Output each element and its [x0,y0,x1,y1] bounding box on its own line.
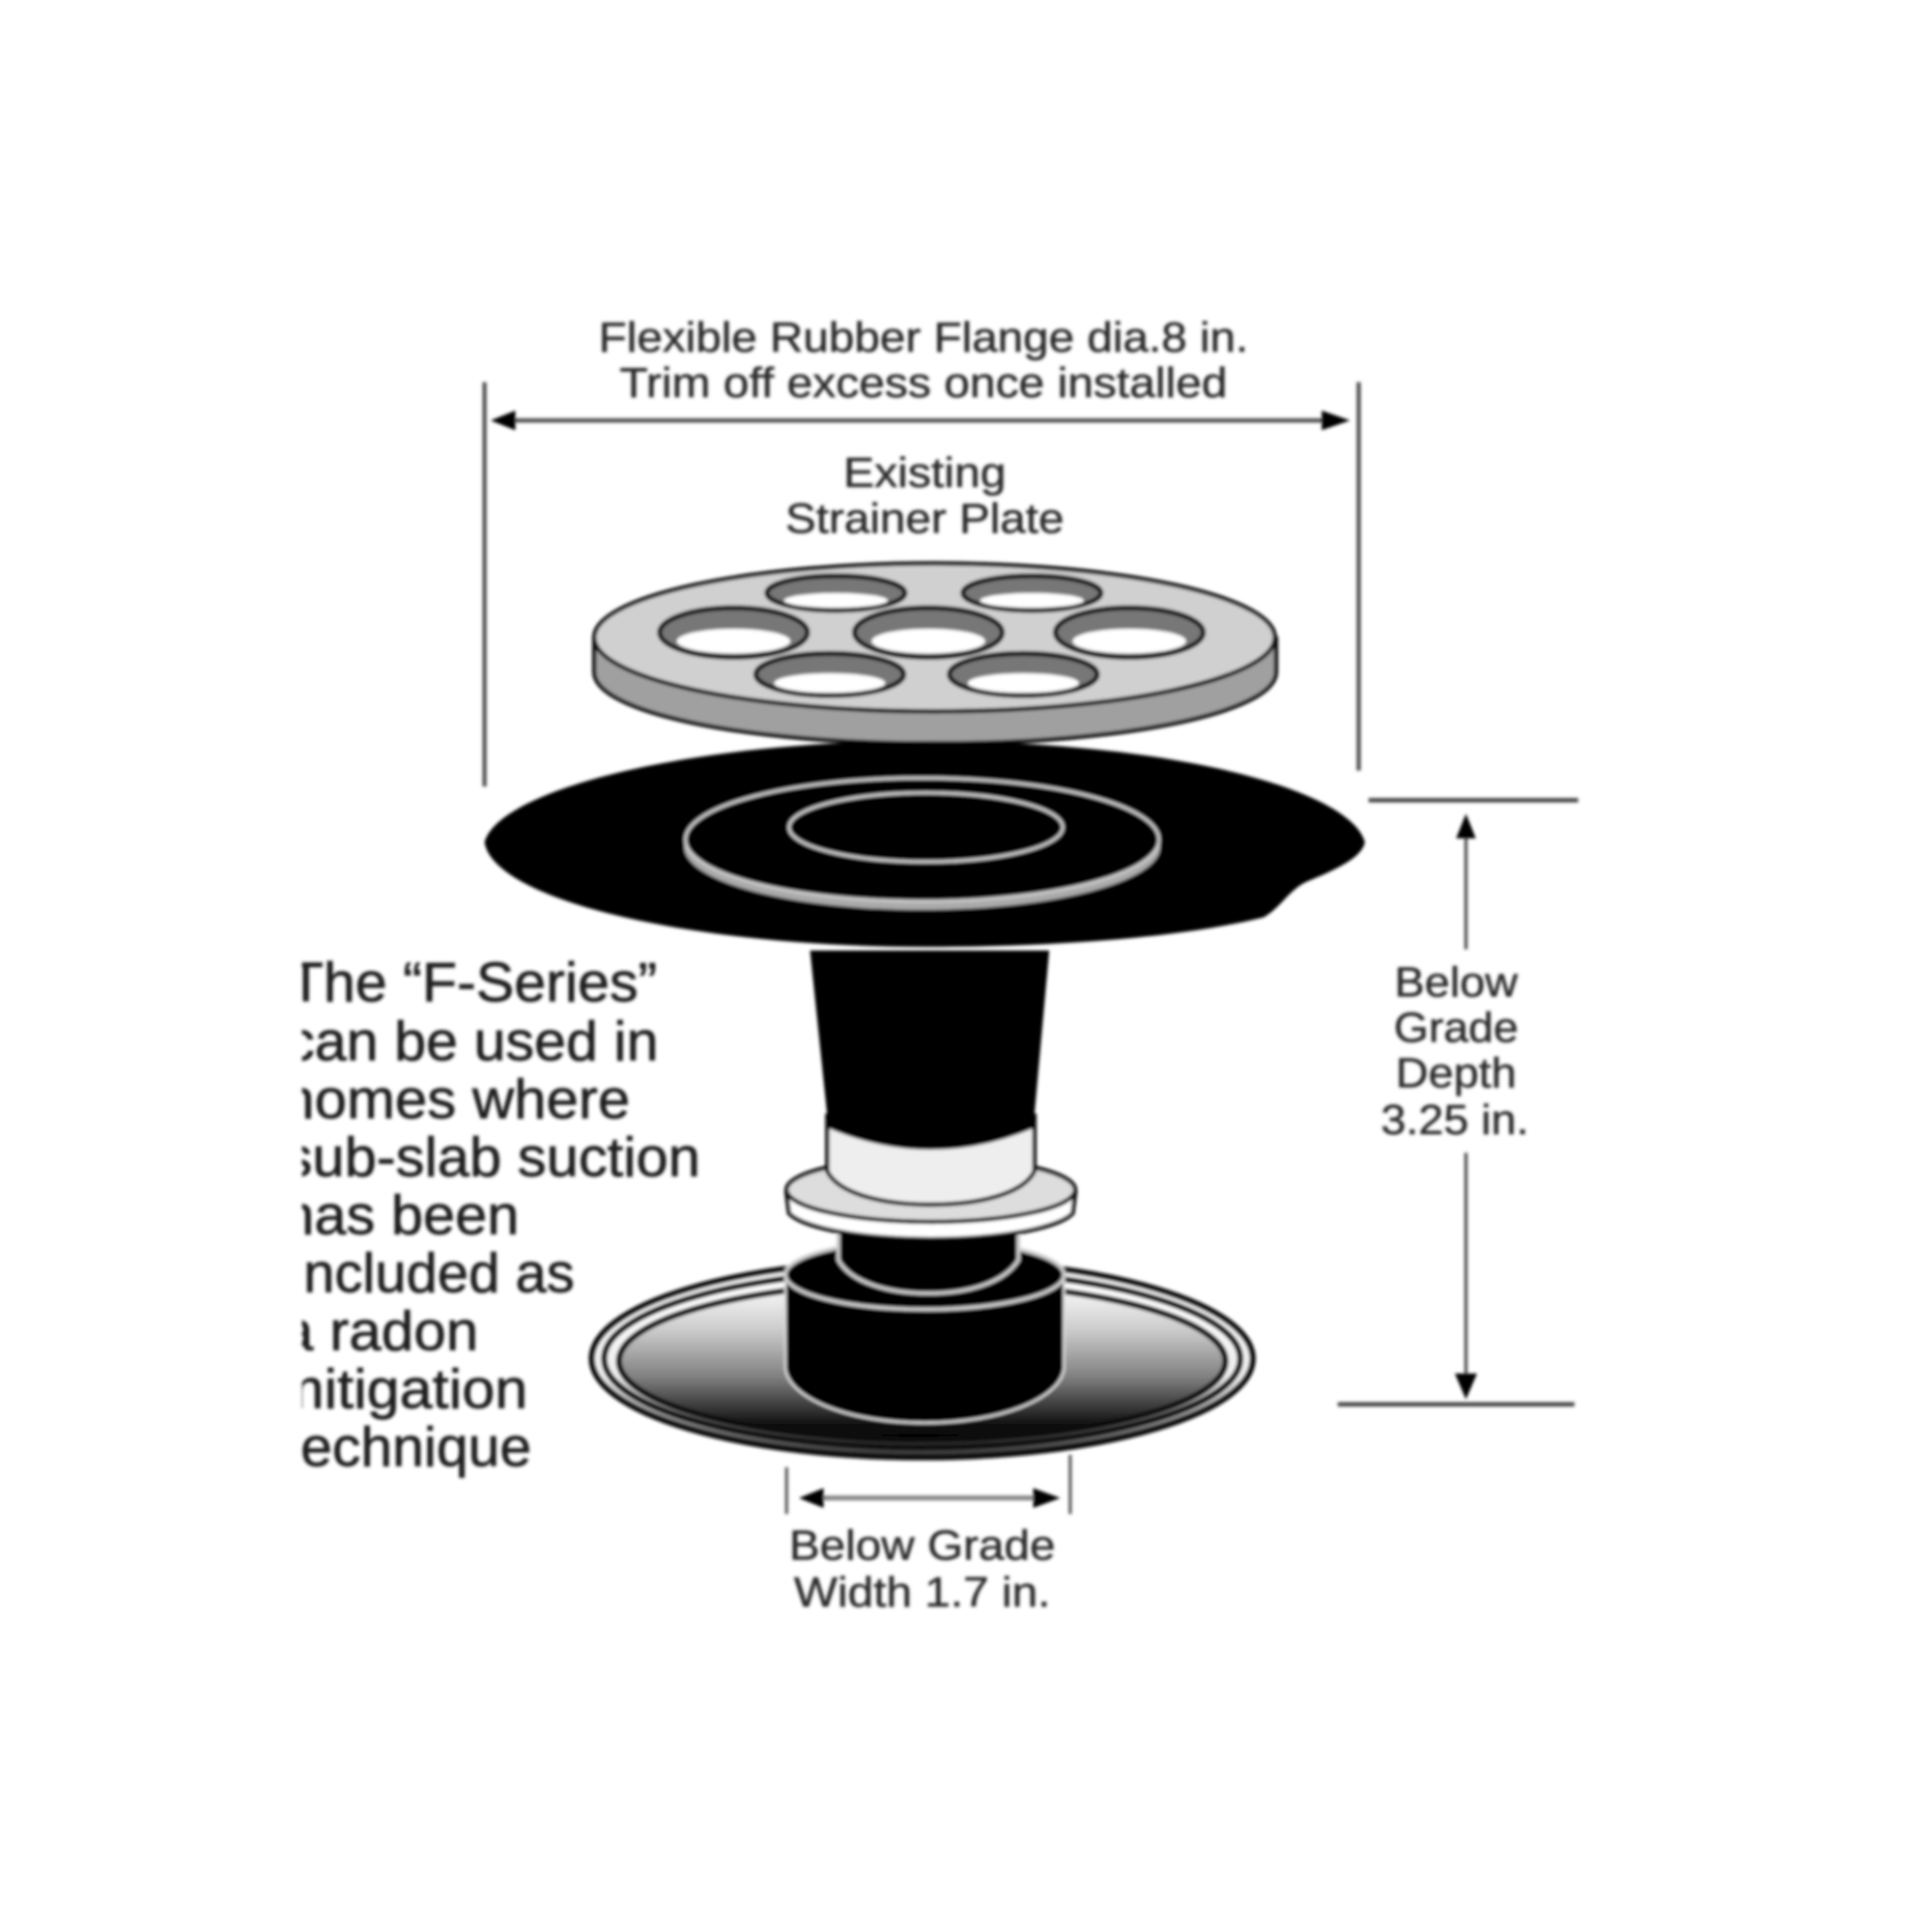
label: flange diameter: Flexible Rubber Flange dia.8 in. [599,315,1248,361]
text: F-Series description: a radon [281,1301,478,1363]
label: existing strainer plate: Strainer Plate [785,496,1064,542]
icon: white band [827,1116,1035,1205]
text: F-Series description: included as [291,1243,575,1305]
text: F-Series description: homes where [282,1069,630,1131]
arrow: depth dimension [1338,800,1578,1405]
icon: lower stem [838,1221,1018,1293]
text: F-Series description: can be used in [286,1011,659,1073]
label: flange diameter: Trim off excess once installed [619,360,1228,407]
label: below grade depth: Below [1395,959,1519,1006]
text: F-Series description: The “F-Series” [289,952,657,1013]
holes [660,576,1204,696]
text: F-Series description [275,952,700,1479]
label: below grade depth [1380,959,1529,1144]
label: existing strainer plate [785,450,1064,542]
text: F-Series description: sub-slab suction [284,1127,700,1189]
label: below grade width: Width 1.7 in. [794,1570,1050,1616]
icon: lower cup [785,1240,1064,1423]
icon: tapered tube [810,951,1049,1150]
label: flange diameter [599,315,1248,407]
arrow: flange width dimension [485,383,1359,786]
arrow: below grade width dimension [786,1455,1070,1514]
label: below grade depth: Grade [1394,1005,1519,1051]
text: F-Series description: has been [282,1185,519,1247]
icon: base dish [592,1260,1253,1458]
diagram: F-Series drain fitting [299,319,1580,1609]
icon: strainer plate [594,563,1276,744]
label: existing strainer plate: Existing [843,450,1006,497]
label: below grade width [789,1523,1056,1616]
text: F-Series description: mitigation [275,1359,527,1421]
label: below grade depth: 3.25 in. [1380,1097,1529,1144]
text: F-Series description: technique [285,1417,531,1479]
label: below grade width: Below Grade [789,1523,1056,1570]
icon: collar [786,1157,1075,1239]
label: below grade depth: Depth [1396,1051,1517,1097]
icon: rubber flange [485,741,1365,947]
